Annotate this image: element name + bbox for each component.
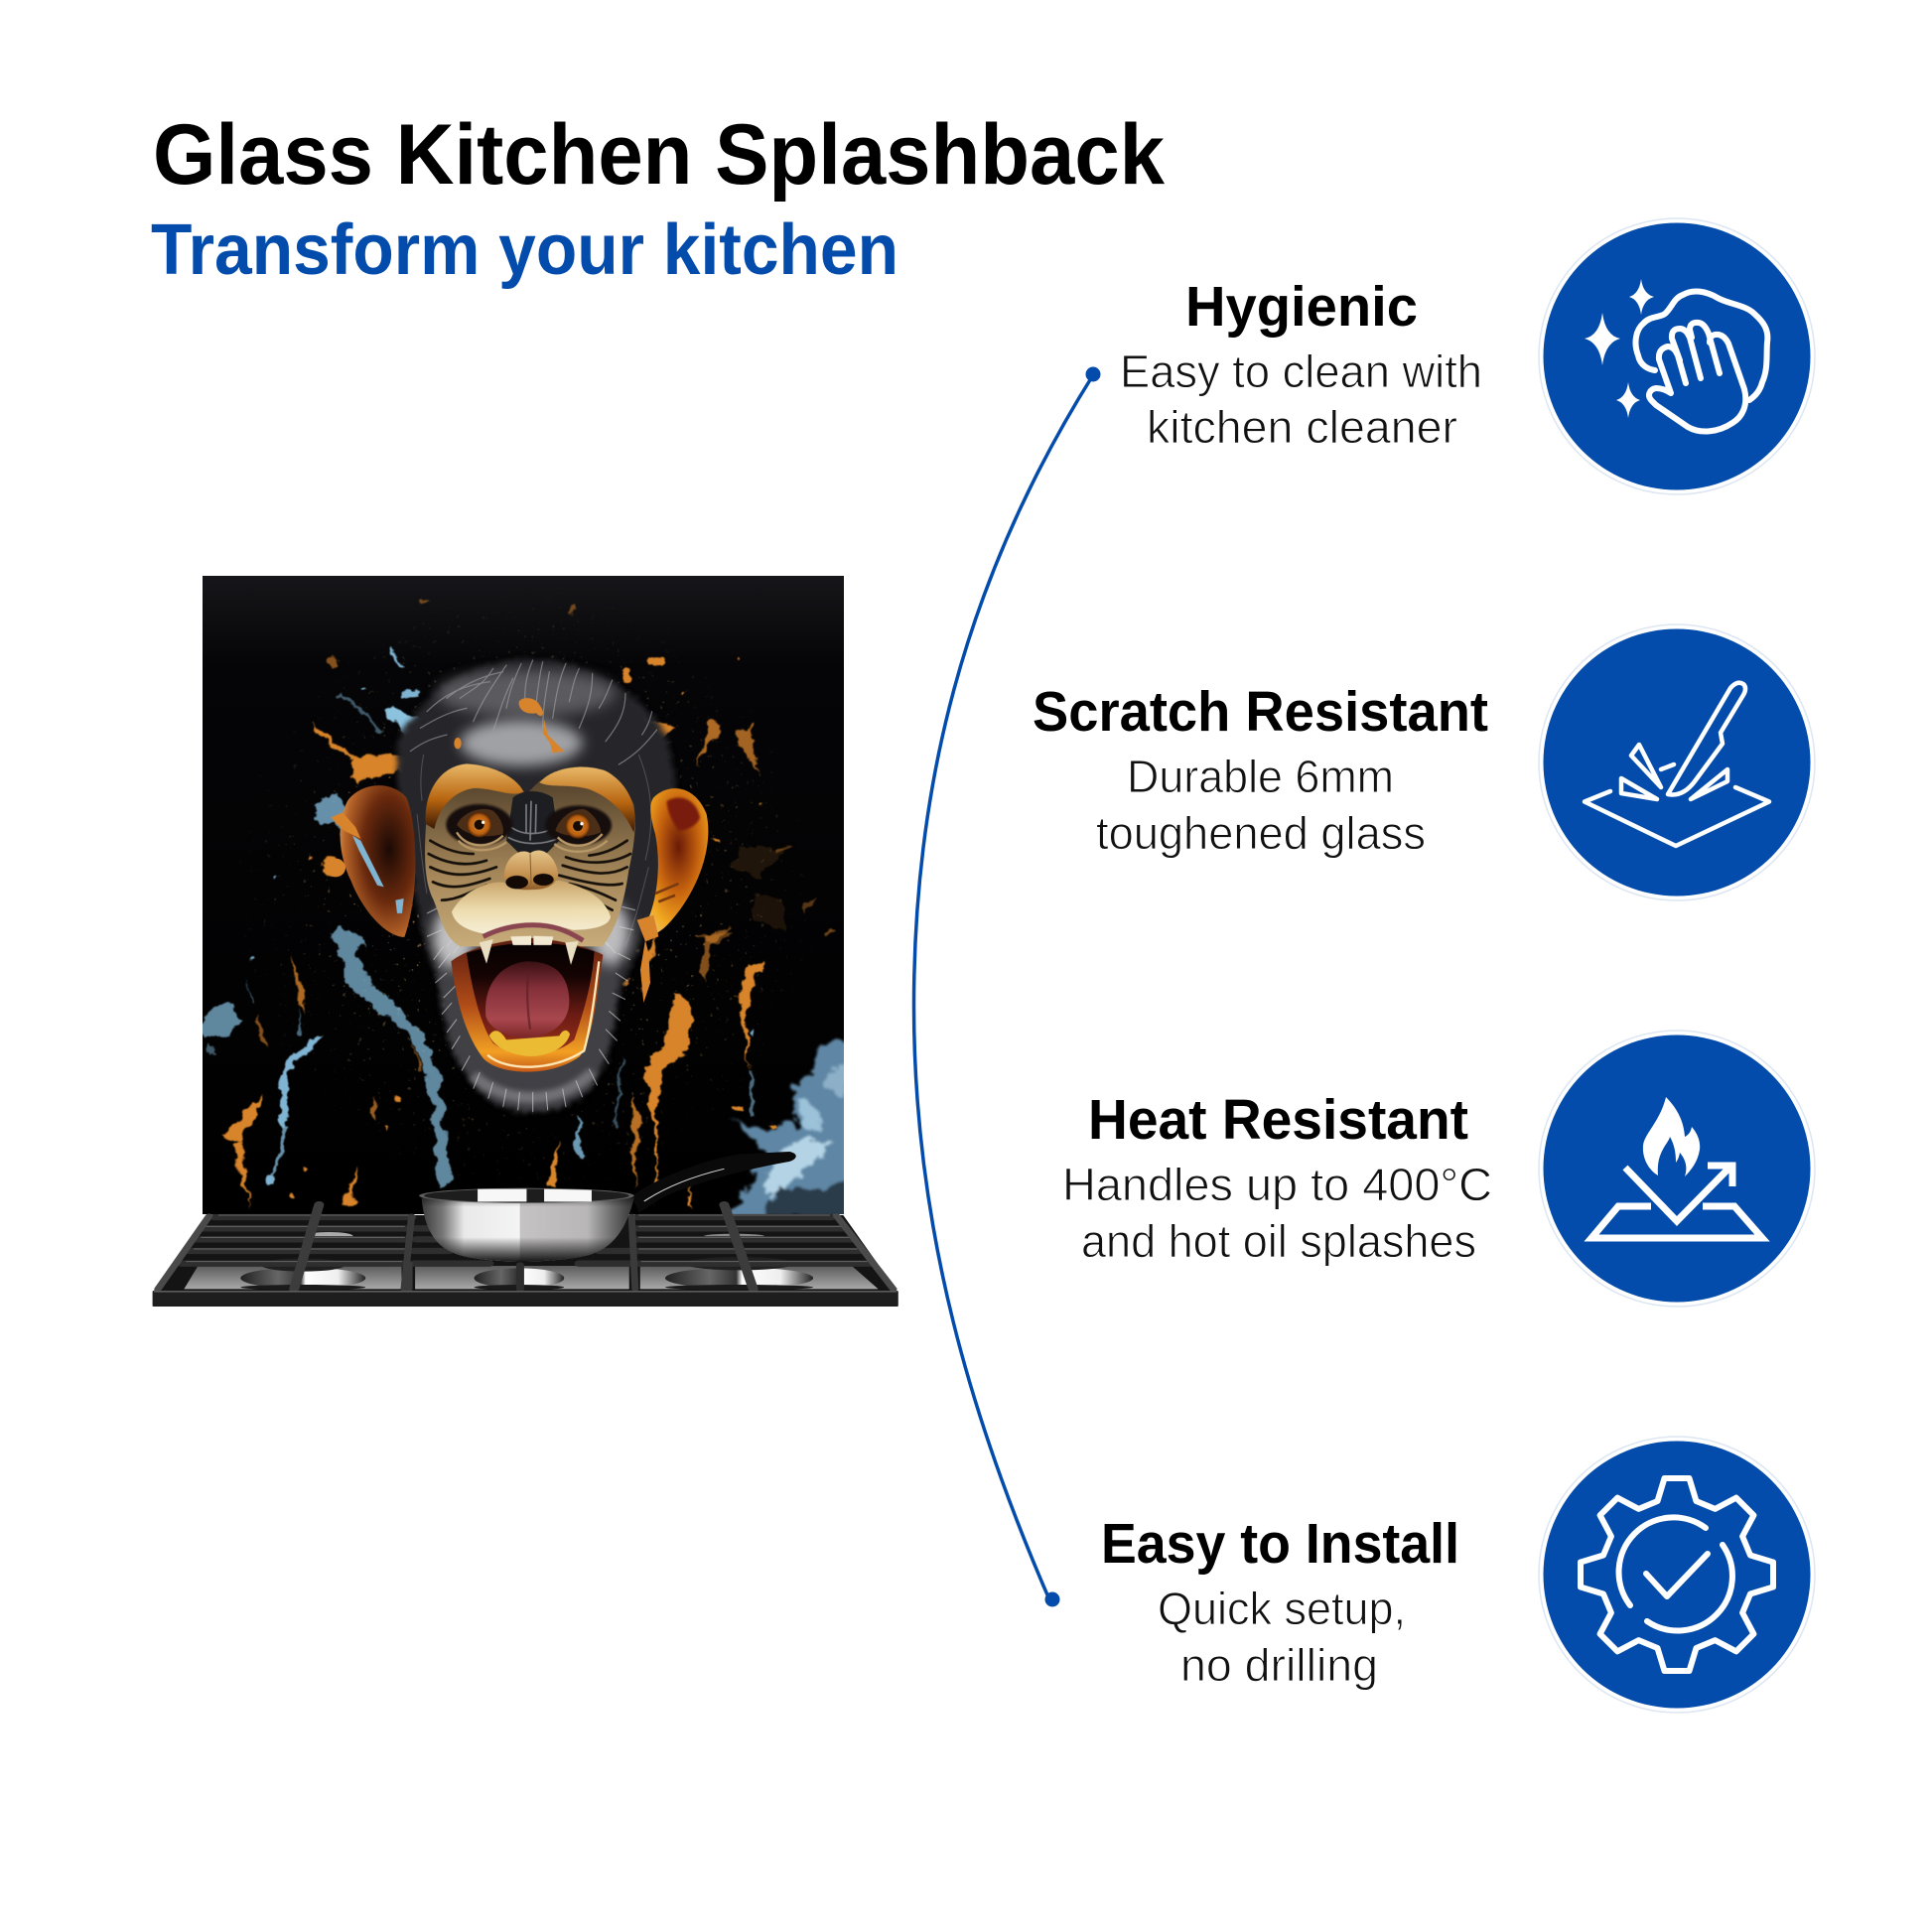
chimp open mouth bbox=[451, 925, 603, 1072]
icon: gear with check mark bbox=[1539, 1437, 1815, 1713]
chimp muzzle bbox=[452, 881, 611, 935]
chimp beard bbox=[427, 901, 635, 1112]
feature text: scratch resistant: toughened glass bbox=[1096, 807, 1426, 859]
pan handle bbox=[631, 1152, 796, 1213]
blue smoke, lower right of panel bbox=[730, 1041, 854, 1221]
product image: splashback above a gas hob bbox=[153, 576, 898, 1307]
chimpanzee portrait bbox=[326, 659, 708, 1112]
connector top dot bbox=[1086, 367, 1100, 381]
feature text: scratch resistant: Scratch Resistant bbox=[1033, 680, 1488, 744]
infographic canvas bbox=[151, 121, 1816, 1714]
gas hob bbox=[153, 1204, 898, 1307]
feature text: scratch resistant bbox=[1033, 680, 1488, 859]
paint speckle across panel bbox=[249, 608, 805, 1180]
title: Glass Kitchen Splashback bbox=[153, 107, 1165, 203]
chimp right eye bbox=[555, 809, 601, 839]
hob front edge bbox=[153, 1291, 898, 1307]
paint splatter: orange bbox=[221, 598, 833, 1208]
connector curve with end dots bbox=[913, 367, 1100, 1606]
connector bottom dot bbox=[1044, 1592, 1060, 1606]
splashback panel bbox=[203, 576, 844, 1214]
feature text: hygienic: Hygienic bbox=[1185, 275, 1418, 339]
chimp brow ridges bbox=[425, 763, 634, 832]
chimp left ear bbox=[326, 785, 415, 937]
chimp face skin with wrinkles bbox=[425, 767, 635, 946]
feature text: hygienic bbox=[1120, 275, 1482, 453]
feature text: heat resistant: Handles up to 400°C bbox=[1062, 1159, 1492, 1210]
feature text: easy to install: Easy to Install bbox=[1101, 1512, 1459, 1576]
chimp nose bbox=[504, 851, 558, 890]
pan body bbox=[422, 1198, 634, 1261]
frying pan bbox=[419, 1152, 796, 1261]
feature text: scratch resistant: Durable 6mm bbox=[1127, 751, 1394, 802]
feature text: heat resistant: and hot oil splashes bbox=[1081, 1215, 1476, 1267]
feature text: easy to install bbox=[1101, 1512, 1459, 1691]
feature text: easy to install: no drilling bbox=[1180, 1639, 1378, 1691]
icon: knife scratching glass sheet bbox=[1539, 624, 1815, 900]
hob steel plates bbox=[184, 1266, 879, 1289]
chimp nose bridge and dark brow centre bbox=[506, 791, 561, 854]
feature text: heat resistant bbox=[1062, 1088, 1492, 1267]
feature text: easy to install: Quick setup, bbox=[1158, 1583, 1406, 1634]
hob burners bbox=[240, 1232, 813, 1290]
chimp right ear bbox=[637, 788, 708, 1003]
icon: hand wiping with cloth and sparkles bbox=[1539, 218, 1815, 494]
feature text: hygienic: Easy to clean with bbox=[1120, 345, 1482, 397]
chimp hair and head fur bbox=[397, 659, 675, 1020]
subtitle: Transform your kitchen bbox=[151, 210, 898, 290]
chimp left eye bbox=[457, 809, 503, 837]
pan rim and interior bbox=[419, 1188, 634, 1203]
icon: flame over heat-deflecting glass bbox=[1539, 1031, 1815, 1307]
paint splatter: blue bbox=[203, 646, 755, 1185]
hob surface bbox=[154, 1215, 897, 1291]
feature text: heat resistant: Heat Resistant bbox=[1088, 1088, 1468, 1152]
chimp eye sockets bbox=[446, 804, 612, 852]
paint drops on chimp forehead bbox=[454, 698, 564, 753]
feature text: hygienic: kitchen cleaner bbox=[1147, 401, 1457, 453]
hob grates bbox=[158, 1204, 894, 1289]
